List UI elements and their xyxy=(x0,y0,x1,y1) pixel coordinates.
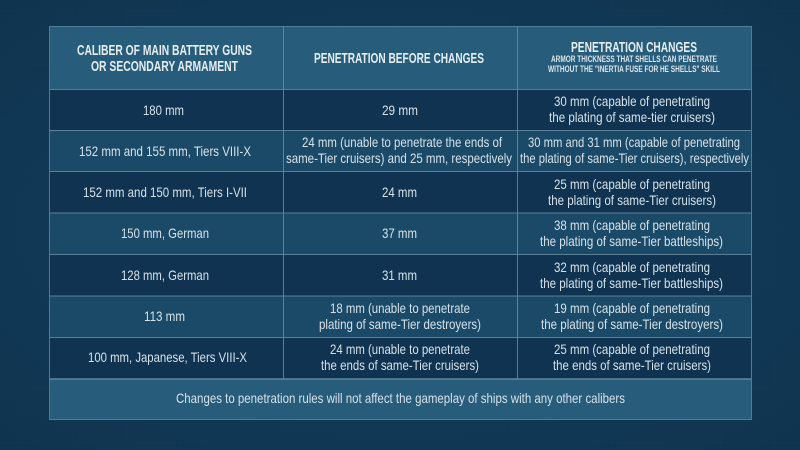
header: penetration changes: ARMOR THICKNESS THAT SHELLS CAN PENETRATE xyxy=(551,54,717,64)
header row xyxy=(49,26,752,89)
table xyxy=(49,26,752,420)
row: 152 mm and 155 mm: 30 mm and 31 mm (capable of penetrating xyxy=(528,135,740,150)
row: 152 mm and 150 mm: 152 mm and 150 mm, Tiers I-VII xyxy=(83,185,247,200)
row: 113 mm: 18 mm (unable to penetrate xyxy=(330,301,470,316)
row: 152 mm and 150 mm xyxy=(49,172,752,213)
row: 113 mm: 19 mm (capable of penetrating xyxy=(554,301,710,316)
row: 113 mm xyxy=(49,296,752,338)
row: 152 mm and 155 mm: 24 mm (unable to penetrate the ends of xyxy=(302,135,502,150)
row: 100 mm Japanese: 24 mm (unable to penetrate xyxy=(330,342,470,357)
row: 100 mm Japanese: 25 mm (capable of penetrating xyxy=(554,342,710,357)
row: 128 mm German xyxy=(49,254,752,296)
row: 152 mm and 155 mm xyxy=(49,130,752,172)
header: caliber: CALIBER OF MAIN BATTERY GUNS xyxy=(77,43,252,59)
footer note xyxy=(49,379,752,420)
row: 113 mm: 113 mm xyxy=(144,309,185,324)
header: penetration changes xyxy=(548,40,720,74)
row: 128 mm German: the plating of same-Tier battleships) xyxy=(540,276,723,291)
header: penetration before changes: PENETRATION BEFORE CHANGES xyxy=(314,51,484,67)
row: 150 mm German xyxy=(49,213,752,254)
row: 152 mm and 150 mm: 24 mm xyxy=(382,185,417,200)
header: penetration changes: WITHOUT THE "INERTIA FUSE FOR HE SHELLS" SKILL xyxy=(548,64,720,74)
row: 100 mm Japanese: 100 mm, Japanese, Tiers VIII-X xyxy=(88,350,247,365)
row: 113 mm: the plating of same-Tier destroyers) xyxy=(541,317,723,332)
row: 150 mm German: 38 mm (capable of penetrating xyxy=(554,218,710,233)
row: 150 mm German: the plating of same-Tier battleships) xyxy=(540,234,723,249)
row: 180 mm: the plating of same-tier cruisers) xyxy=(549,110,715,125)
row: 180 mm: 180 mm xyxy=(143,103,184,118)
row: 100 mm Japanese: the ends of same-Tier cruisers) xyxy=(553,358,711,373)
header: caliber: OR SECONDARY ARMAMENT xyxy=(91,59,238,75)
row: 180 mm: 30 mm (capable of penetrating xyxy=(554,94,710,109)
header: penetration changes: PENETRATION CHANGES xyxy=(571,40,697,56)
row: 152 mm and 155 mm: same-Tier cruisers) and 25 mm, respectively xyxy=(286,151,512,166)
row: 100 mm Japanese xyxy=(49,338,752,378)
header: caliber xyxy=(77,43,252,75)
row: 152 mm and 155 mm: 152 mm and 155 mm, Tiers VIII-X xyxy=(79,144,251,159)
row: 152 mm and 155 mm: the plating of same-Tier cruisers), respectively xyxy=(520,151,749,166)
row: 113 mm: plating of same-Tier destroyers) xyxy=(319,317,481,332)
row: 180 mm: 29 mm xyxy=(382,103,418,118)
row: 150 mm German: 37 mm xyxy=(382,226,417,241)
row: 128 mm German: 31 mm xyxy=(382,268,417,283)
row: 150 mm German: 150 mm, German xyxy=(121,226,209,241)
row: 128 mm German: 32 mm (capable of penetrating xyxy=(554,260,710,275)
row: 180 mm xyxy=(49,89,752,130)
footer note: Changes to penetration rules will not affect the gameplay of ships with any other calibers xyxy=(176,391,625,406)
row: 100 mm Japanese: the ends of same-Tier cruisers) xyxy=(321,358,479,373)
row: 128 mm German: 128 mm, German xyxy=(121,268,209,283)
row: 152 mm and 150 mm: 25 mm (capable of penetrating xyxy=(554,177,710,192)
row: 152 mm and 150 mm: the plating of same-Tier cruisers) xyxy=(548,193,716,208)
